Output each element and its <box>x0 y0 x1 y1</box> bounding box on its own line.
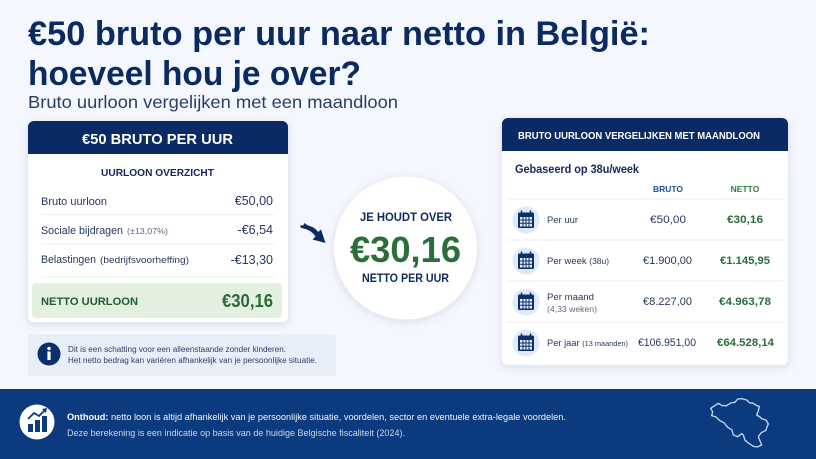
row: per uur: €30,16 <box>727 214 763 226</box>
row: per jaar <box>512 330 775 356</box>
circle: netto result: JE HOUDT OVER <box>360 212 453 224</box>
panel: uurloon overzicht <box>28 121 288 322</box>
row: sociale bijdragen: (±13,07%) <box>127 226 168 236</box>
row: belastingen: (bedrijfsvoorheffing) <box>100 255 189 266</box>
column headings <box>653 184 760 194</box>
row: per maand: Per maand <box>547 292 594 303</box>
footer text <box>67 412 566 439</box>
icon: map of Belgium <box>711 399 768 447</box>
overview heading: UURLOON OVERZICHT <box>101 167 215 179</box>
column headings: BRUTO <box>653 184 683 194</box>
icon: calendar <box>512 248 540 274</box>
row: per uur <box>512 206 763 234</box>
table header: BRUTO UURLOON VERGELIJKEN MET MAANDLOON <box>518 131 760 142</box>
row: per jaar: €64.528,14 <box>717 337 775 349</box>
row: per jaar: Per jaar (13 maanden) <box>547 338 628 349</box>
callout text: Dit is een schatting voor een alleenstaande zonder kinderen. <box>68 345 286 354</box>
title <box>28 15 650 93</box>
subtitle: Bruto uurloon vergelijken met een maandloon <box>28 92 398 112</box>
callout: schatting <box>28 334 336 376</box>
row: per week: Per week (38u) <box>547 256 609 267</box>
circle: netto result: €30,16 <box>350 229 461 270</box>
row: per week: €1.900,00 <box>643 255 692 267</box>
row: belastingen: -€13,30 <box>231 253 273 267</box>
row: per week: €1.145,95 <box>720 255 770 267</box>
row: belastingen: Belastingen <box>41 254 96 266</box>
column headings: NETTO <box>731 184 760 194</box>
row: per maand: €4.963,78 <box>719 296 771 308</box>
netto uurloon highlight: NETTO UURLOON <box>41 296 138 308</box>
callout text: Het netto bedrag kan variëren afhankelijk van je persoonlijke situatie. <box>68 356 317 365</box>
footer text: Onthoud: netto loon is altijd afhankelijk van je persoonlijke situatie, voordelen, sector en eventuele extra-legale voordelen. <box>67 412 566 423</box>
row: belastingen <box>41 253 273 267</box>
icon: calendar <box>512 330 540 356</box>
panel: vergelijking maandloon <box>502 118 788 365</box>
row: sociale bijdragen <box>41 223 273 237</box>
icon: calendar <box>512 288 540 316</box>
table basis: Gebaseerd op 38u/week <box>515 164 640 176</box>
footer band <box>0 389 816 459</box>
row: per uur: Per uur <box>547 215 578 226</box>
row: bruto uurloon: Bruto uurloon <box>41 196 107 208</box>
title: €50 bruto per uur naar netto in België: <box>28 15 650 53</box>
icon: info <box>38 342 60 366</box>
row: sociale bijdragen: -€6,54 <box>238 223 273 237</box>
row: per week <box>512 248 770 274</box>
title: hoeveel hou je over? <box>28 55 361 93</box>
row: per jaar: €106.951,00 <box>638 337 696 349</box>
netto uurloon highlight <box>32 283 282 318</box>
row: bruto uurloon: €50,00 <box>235 194 273 208</box>
table header <box>502 118 788 151</box>
row: bruto uurloon <box>41 194 273 208</box>
row: per uur: €50,00 <box>650 214 686 226</box>
row: per maand: (4,33 weken) <box>547 305 597 314</box>
footer text: Deze berekening is een indicatie op basis van de huidige Belgische fiscaliteit (2024). <box>67 428 405 439</box>
circle: netto result <box>334 176 477 320</box>
arrow <box>300 223 326 243</box>
panel header: €50 BRUTO PER UUR <box>82 131 233 148</box>
icon: calendar <box>512 206 540 234</box>
netto uurloon highlight: €30,16 <box>222 291 273 311</box>
row: sociale bijdragen: Sociale bijdragen <box>41 225 123 237</box>
callout text <box>68 345 317 365</box>
circle: netto result: NETTO PER UUR <box>362 273 450 285</box>
panel header <box>28 121 288 154</box>
row: per maand: €8.227,00 <box>643 296 692 308</box>
row: per maand <box>512 288 771 316</box>
icon: growth chart <box>20 404 54 440</box>
